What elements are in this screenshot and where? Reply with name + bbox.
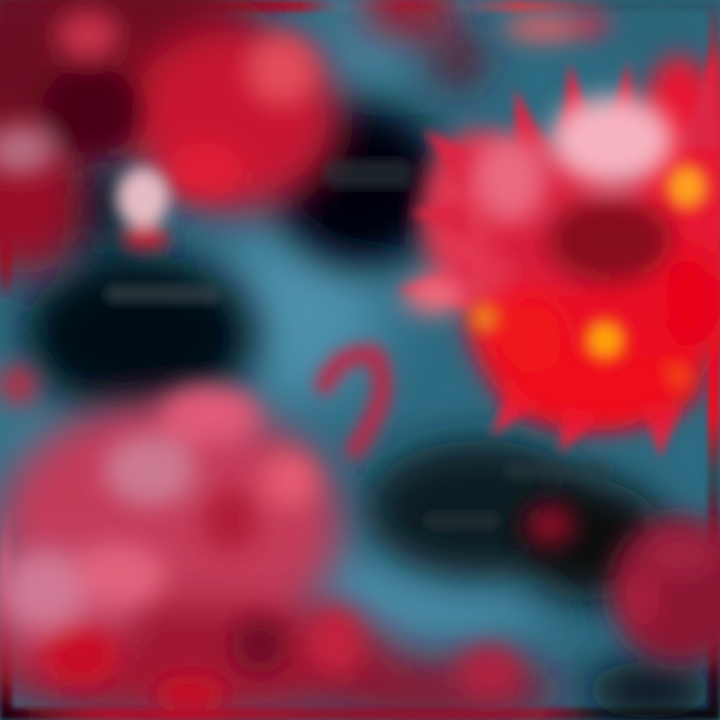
virus: large bright red xyxy=(398,48,720,458)
virus cluster: bottom left pink xyxy=(0,385,574,720)
small virus fragment: centre xyxy=(325,354,382,450)
virus: bottom right dark red xyxy=(610,515,720,665)
virus cluster: top left dark red xyxy=(0,0,610,405)
faint dark labels xyxy=(105,160,610,530)
yellow glow spots xyxy=(470,165,707,390)
spikes around red virus xyxy=(398,48,720,458)
